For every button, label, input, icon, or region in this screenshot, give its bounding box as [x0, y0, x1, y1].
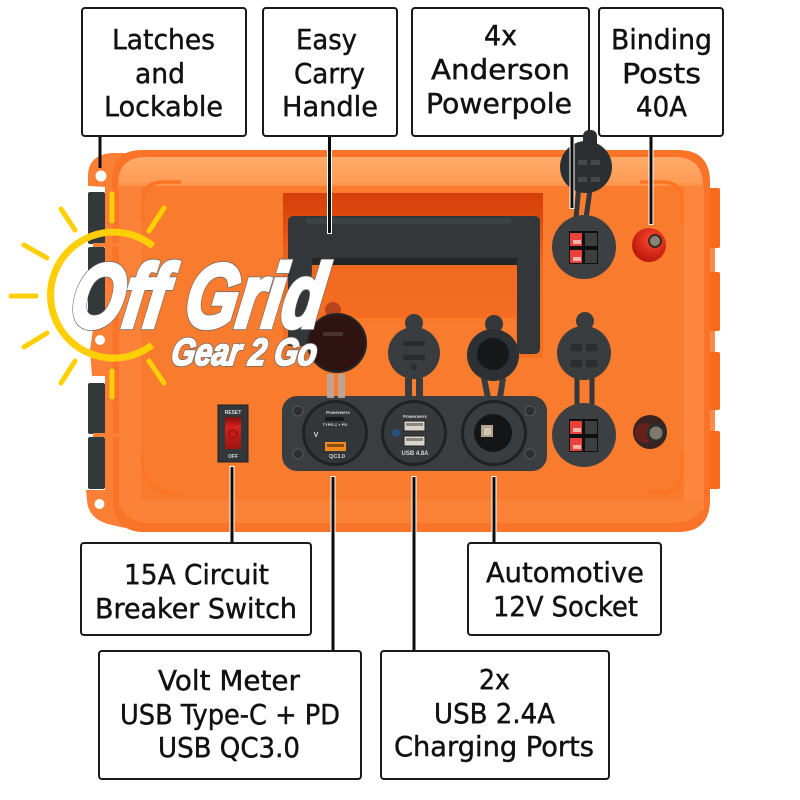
bottom Anderson Powerpole socket [552, 312, 616, 467]
volt meter and USB-C socket: Powerwerx [326, 410, 350, 415]
socket [552, 215, 616, 279]
dust caps for dash sockets [308, 302, 519, 398]
label: Latches and Lockable: Latches [112, 24, 215, 56]
top Anderson Powerpole socket [552, 141, 616, 279]
corner brackets [142, 182, 682, 494]
Off Grid: Off Grid [65, 247, 334, 347]
cap [560, 141, 612, 193]
Off Grid: Off Grid [65, 247, 334, 347]
volt meter and USB-C socket: V [314, 432, 319, 439]
label: 4x Anderson Powerpole: Powerpole [426, 88, 572, 120]
label: 4x Anderson Powerpole: Anderson [431, 54, 570, 86]
sun arc [51, 232, 153, 358]
handle recess [283, 193, 543, 358]
label: Latches and Lockable [82, 8, 246, 136]
USB 4.8A socket [381, 400, 447, 466]
label: Automotive 12V Socket: Automotive [486, 557, 644, 589]
screws [293, 406, 535, 459]
label: 4x Anderson Powerpole: 4x [484, 20, 517, 52]
red binding post [632, 228, 666, 262]
case body [112, 150, 710, 532]
sun logo [11, 194, 164, 397]
label: 2x USB 2.4A Charging Ports [381, 651, 609, 779]
mounting holes [94, 170, 106, 509]
Gear 2 Go: Gear 2 Go [169, 331, 320, 374]
label: 2x USB 2.4A Charging Ports: USB 2.4A [434, 698, 555, 730]
label: Volt Meter USB Type-C PD QC3.0 [99, 651, 361, 779]
label: Latches and Lockable: Lockable [104, 91, 223, 123]
logo wordmark [65, 247, 334, 374]
circuit breaker rocker switch: OFF [228, 454, 238, 460]
volt meter and USB-C socket: QC3.0 [329, 454, 345, 460]
light top rim band [118, 157, 703, 190]
label: 2x USB 2.4A Charging Ports: 2x [479, 664, 510, 696]
leader lines [100, 136, 651, 651]
left rim band [119, 186, 141, 507]
black hinge segments [88, 192, 105, 489]
USB 4.8A socket: USB 4.8A [401, 451, 429, 457]
strap [576, 185, 590, 218]
black binding post [633, 415, 667, 449]
circuit breaker rocker switch [218, 405, 248, 462]
volt meter and USB-C socket [302, 400, 368, 466]
label: Binding Posts 40A: 40A [636, 91, 687, 123]
label: Automotive 12V Socket [468, 543, 661, 635]
label: Volt Meter USB Type-C PD QC3.0: Volt Meter [158, 665, 301, 697]
bottom rim band [119, 500, 704, 523]
12V cap [467, 315, 519, 398]
recess lower shelf [340, 318, 516, 322]
volt meter and USB-C socket: TYPE-C + PD [323, 422, 347, 427]
label: 2x USB 2.4A Charging Ports: Charging Ports [394, 731, 594, 763]
label: Easy Carry Handle: Easy [296, 24, 357, 56]
label: 15A Circuit Breaker Switch: Breaker Switch [95, 593, 297, 625]
label: Binding Posts 40A: Binding [611, 24, 712, 56]
socket [552, 403, 616, 467]
volt meter clear strap [327, 374, 345, 398]
circuit breaker rocker switch: RESET [225, 410, 241, 416]
cap [557, 312, 611, 380]
USB cap [388, 314, 440, 398]
label: Automotive 12V Socket: 12V Socket [493, 591, 638, 623]
carry handle [288, 216, 540, 354]
label: Binding Posts 40A: Posts [622, 58, 701, 90]
left hinge lugs [86, 153, 125, 528]
label: Volt Meter USB Type-C PD QC3.0: USB Type-C + PD [120, 699, 340, 731]
dashboard socket panel [282, 396, 547, 471]
sun rays [11, 194, 164, 397]
label: 15A Circuit Breaker Switch: 15A Circuit [124, 559, 269, 591]
label: Volt Meter USB Type-C PD QC3.0: USB QC3.0 [158, 732, 300, 764]
label: Binding Posts 40A [599, 8, 723, 136]
label: Easy Carry Handle: Carry [294, 58, 365, 90]
label: Easy Carry Handle [263, 8, 397, 136]
Gear 2 Go: Gear 2 Go [169, 331, 320, 374]
USB 4.8A socket: Powerwerx [403, 414, 427, 419]
label: 4x Anderson Powerpole [412, 8, 589, 136]
volt meter red cap [308, 302, 366, 372]
right rim band [684, 186, 704, 510]
right side latches tabs [708, 188, 720, 489]
orange power box [86, 150, 720, 532]
strap [577, 378, 592, 406]
cap nub over label corner [583, 130, 597, 152]
hinge pin orange tabs [93, 243, 119, 437]
inner panel [141, 186, 684, 500]
label: Latches and Lockable: and [135, 58, 185, 90]
label: Easy Carry Handle: Handle [282, 91, 378, 123]
label: 15A Circuit Breaker Switch [81, 543, 311, 635]
automotive 12V socket [461, 400, 527, 466]
